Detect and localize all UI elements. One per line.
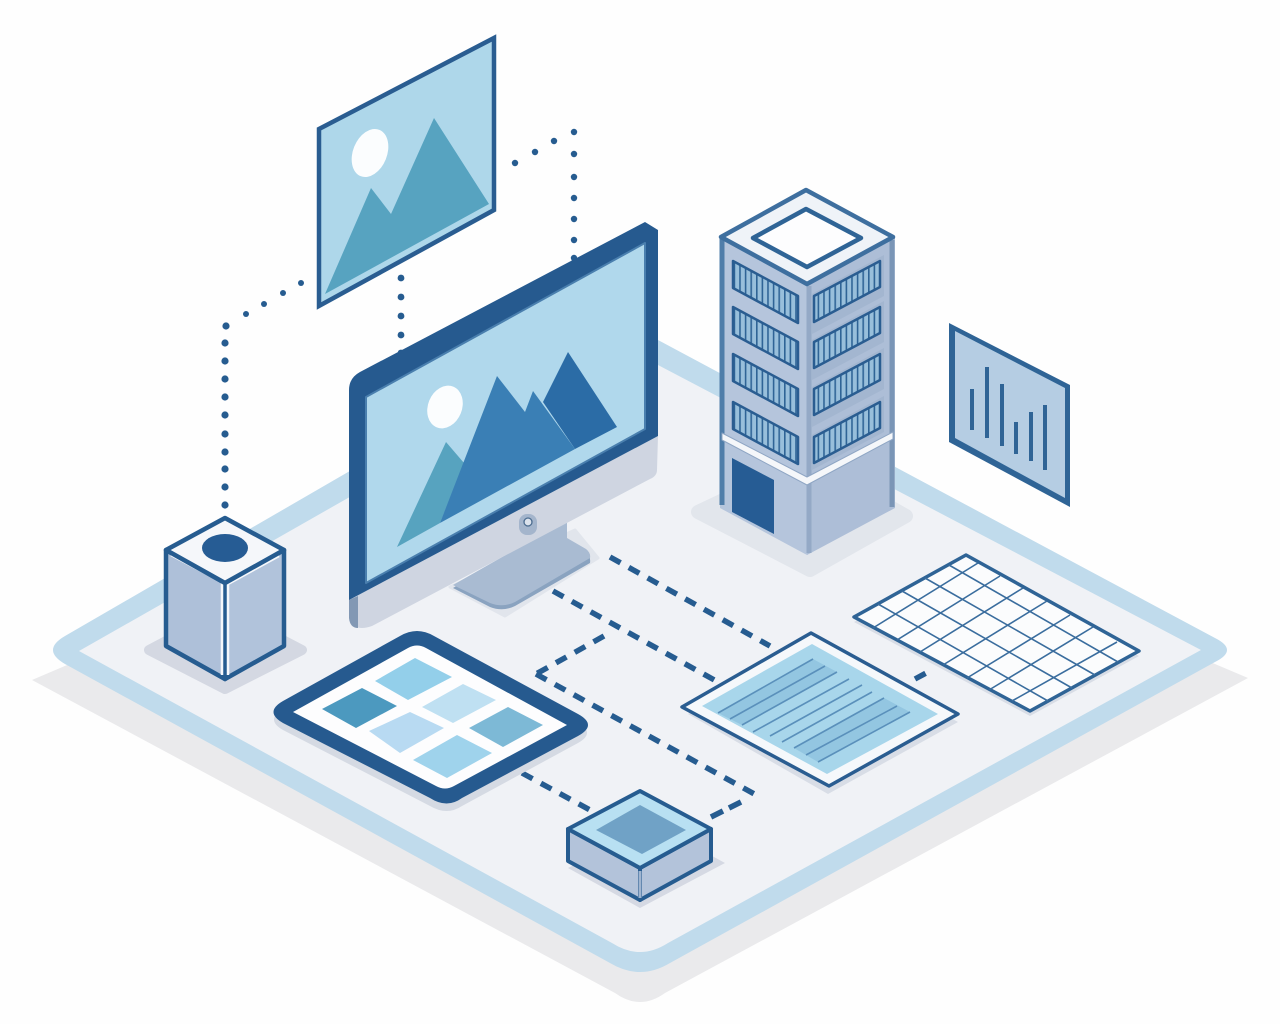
tower: right face: [807, 237, 895, 555]
sheet: darker bands: [718, 659, 910, 762]
tower: roof: [721, 190, 893, 284]
picture: moon: [345, 123, 395, 183]
tower: right face shaded bands: [812, 255, 884, 470]
connector: dotted lines: [221, 129, 577, 509]
monitor: stand: [453, 520, 590, 609]
tower: window bands: [733, 261, 880, 464]
monitor: moon: [421, 380, 469, 434]
panel: floating landscape picture: [319, 38, 494, 306]
monitor: dark mountain: [543, 352, 617, 449]
cube: dark disc: [202, 534, 248, 562]
platform: base: [32, 340, 1248, 1002]
monitor: chin left strip: [349, 596, 358, 628]
tower: door: [732, 458, 774, 534]
cube: white highlights: [171, 555, 279, 675]
device: cube with circle: [149, 518, 302, 689]
tower: corner strips: [722, 238, 892, 553]
monitor: main mountains: [440, 376, 575, 523]
tower: left face: [720, 237, 807, 555]
monitor: [349, 222, 658, 628]
shadow: monitor stand: [450, 530, 598, 616]
device: small box: [568, 791, 725, 908]
box: inner square: [596, 805, 686, 854]
sheet: lines: [718, 659, 910, 762]
monitor: frame: [349, 222, 658, 600]
tablet: tiles: [375, 658, 452, 700]
box: center strip: [638, 871, 642, 898]
panel: striped sheet: [682, 633, 958, 794]
monitor: power button: [519, 514, 537, 535]
picture: mountains: [325, 118, 489, 294]
monitor: screen: [366, 243, 645, 583]
panel: grid sheet: [854, 555, 1139, 716]
tower: white ledge: [722, 432, 893, 485]
device: tablet: [274, 631, 588, 811]
monitor: back mountain: [397, 442, 464, 547]
tower: [720, 190, 895, 555]
monitor: chin: [349, 436, 658, 628]
shadow: tower: [698, 460, 906, 570]
panel: bar chart: [949, 323, 1070, 507]
chart bars: [972, 367, 1045, 470]
connector: dashed lines: [522, 557, 928, 817]
